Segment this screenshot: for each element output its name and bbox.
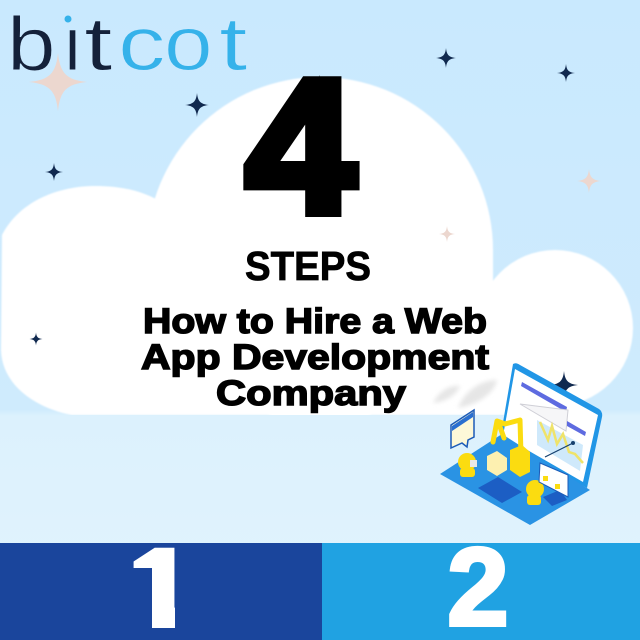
logo: bitcot: ı bbox=[62, 2, 83, 87]
decorative sparkle stars bbox=[29, 48, 601, 346]
box on robot table bbox=[487, 451, 507, 476]
title text: App Development bbox=[141, 337, 489, 377]
title text: How to Hire a Web bbox=[143, 301, 487, 341]
screen window bars bbox=[521, 382, 567, 412]
logo: bitcot: t bbox=[219, 2, 248, 87]
chart line bbox=[540, 422, 583, 463]
robot arm bbox=[493, 420, 530, 477]
logo: bitcot: c bbox=[118, 2, 166, 87]
faint cloud smudges bbox=[433, 380, 497, 408]
title text bbox=[141, 301, 489, 413]
laptop base bbox=[440, 434, 590, 525]
title text: Company bbox=[216, 373, 406, 413]
panel: step 2 bbox=[322, 526, 640, 640]
front robot bbox=[526, 480, 544, 505]
panel: step 1 bbox=[0, 543, 322, 640]
laptop illustration bbox=[440, 363, 602, 525]
heading: STEPS: STEPS bbox=[245, 243, 371, 289]
chat bubble card bbox=[451, 410, 474, 448]
logo: bitcot: b bbox=[7, 2, 56, 87]
star behind laptop bbox=[550, 371, 578, 399]
logo: bitcot: o bbox=[164, 2, 213, 87]
left robot bbox=[458, 453, 477, 477]
cloud bbox=[1, 77, 633, 423]
logo: bitcot: t bbox=[84, 2, 113, 87]
logo: bitcot bbox=[7, 2, 248, 87]
laptop screen bbox=[500, 363, 602, 488]
big number 4: 4 bbox=[246, 41, 355, 253]
white info card bbox=[539, 463, 568, 497]
data connector bbox=[545, 443, 573, 457]
